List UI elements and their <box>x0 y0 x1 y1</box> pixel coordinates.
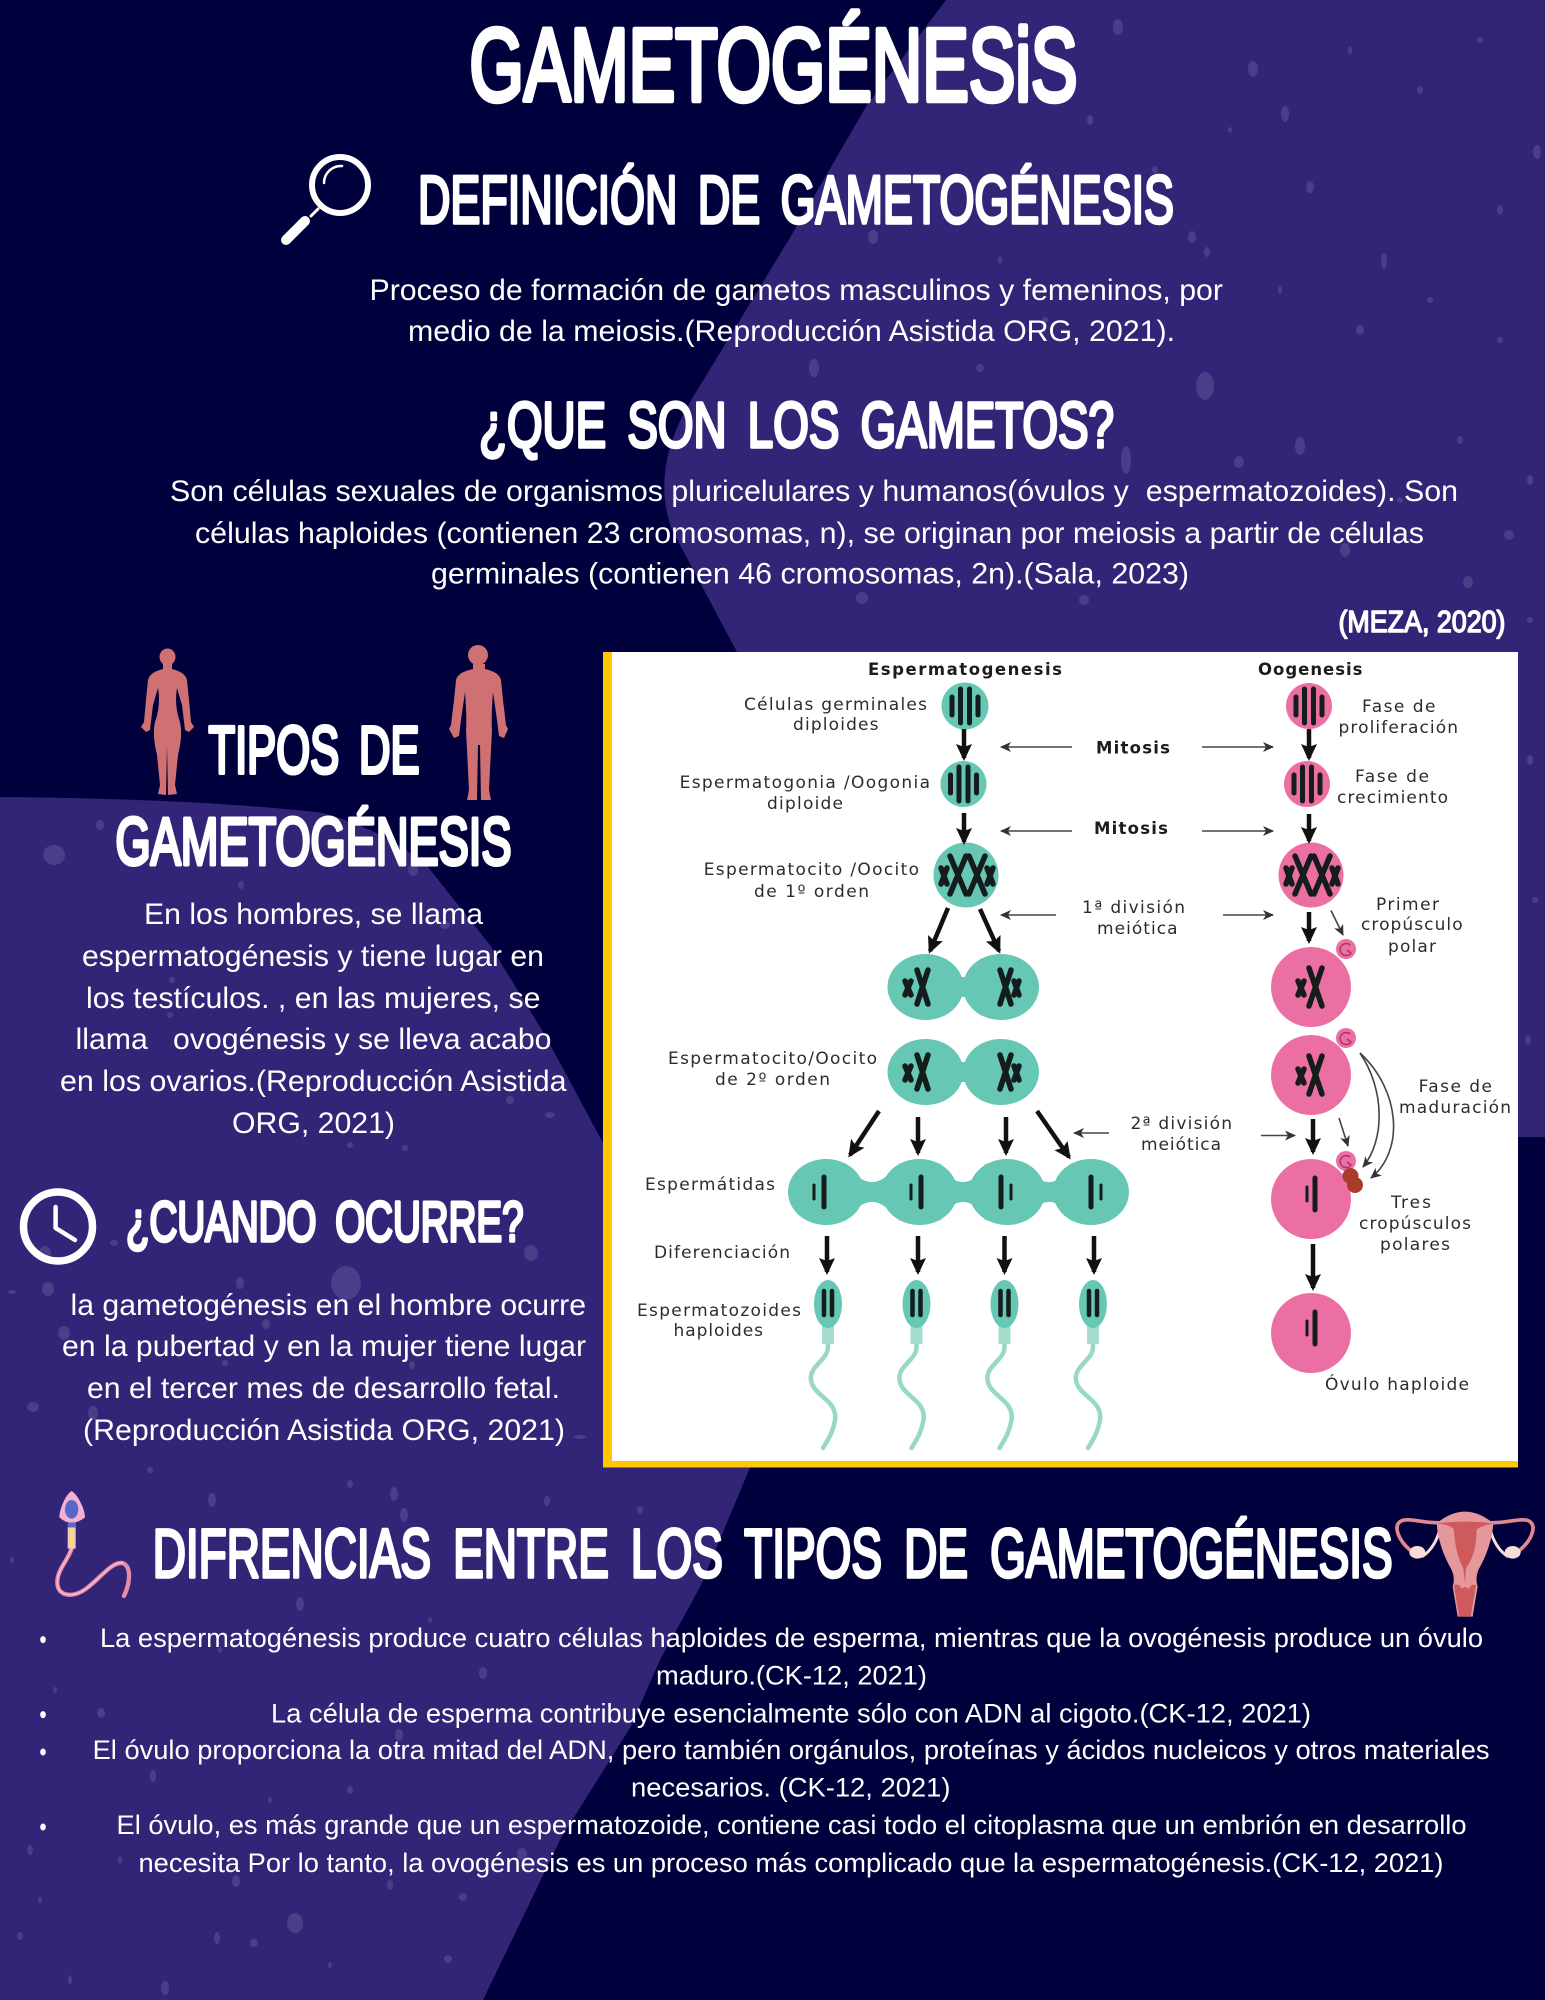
diagram labels: Mitosis <box>1096 739 1170 758</box>
diagram labels: de 2º orden <box>715 1070 830 1090</box>
diagram labels: de 1º orden <box>754 882 869 902</box>
chromosomes <box>814 689 1338 1344</box>
diagram labels: maduración <box>1399 1098 1511 1118</box>
title: GAMETOGÉNESiS <box>470 8 1078 122</box>
text: cuándo ocurre: en la pubertad y en la mujer tiene lugar <box>62 1330 586 1363</box>
text: tipos: En los hombres, se llama <box>144 898 484 931</box>
diagram labels <box>637 660 1511 1395</box>
heading: tipos de gametogénesis <box>116 713 512 880</box>
diagram labels: Fase de <box>1355 767 1429 787</box>
diagram labels: Espermatogonia /Oogonia <box>680 773 930 793</box>
text: cuándo ocurre: la gametogénesis en el hombre ocurre <box>70 1289 586 1322</box>
green cells <box>788 682 1129 1225</box>
text: tipos <box>60 898 567 1140</box>
list: diferencias: necesarios. (CK-12, 2021) <box>631 1772 950 1802</box>
text: gametos: Son células sexuales de organismos pluricelulares y humanos(óvulos y espermatozoides). Son <box>170 475 1458 508</box>
diagram labels: meiótica <box>1097 919 1178 939</box>
diagram labels: Espermatozoides <box>637 1301 801 1321</box>
diagram labels: Espermatocito /Oocito <box>704 860 919 880</box>
text: tipos: espermatogénesis y tiene lugar en <box>82 940 544 973</box>
diagram labels: 1ª división <box>1082 898 1185 918</box>
heading: cuándo ocurre: ¿CUANDO OCURRE? <box>126 1190 524 1254</box>
icon: female body <box>141 648 194 795</box>
list: diferencias: El óvulo, es más grande que un espermatozoide, contiene casi todo el citoplasma que un embrión en desarrollo <box>116 1810 1467 1840</box>
diagram labels: haploides <box>674 1321 763 1341</box>
diagram labels: Espermatocito/Oocito <box>668 1049 877 1069</box>
text: definición <box>370 274 1223 348</box>
heading: tipos de gametogénesis: TIPOS DE <box>208 713 420 788</box>
sperm cells <box>811 1280 1107 1448</box>
diagram labels: Primer <box>1376 895 1439 915</box>
list: diferencias: La espermatogénesis produce cuatro células haploides de esperma, mientras que la ovogénesis produce un óvulo <box>100 1623 1483 1653</box>
icon: clock <box>24 1192 92 1261</box>
diagram labels: Fase de <box>1362 697 1436 717</box>
thin arrows <box>1001 747 1394 1178</box>
bullets <box>40 1636 46 1830</box>
diagram labels: Mitosis <box>1094 819 1168 838</box>
list: diferencias: maduro.(CK-12, 2021) <box>656 1661 927 1691</box>
diagram labels: polar <box>1388 937 1436 957</box>
diagram labels: Células germinales <box>744 695 927 715</box>
diagram labels: Óvulo haploide <box>1325 1373 1469 1395</box>
heading: tipos de gametogénesis: GAMETOGÉNESIS <box>116 804 512 880</box>
icon: magnifying glass <box>286 157 368 240</box>
diagram labels: proliferación <box>1338 718 1458 738</box>
text: tipos: los testículos. , en las mujeres, se <box>86 982 540 1015</box>
text: gametos: células haploides (contienen 23 cromosomas, n), se originan por meiosis a partir de células <box>195 517 1424 550</box>
diagram labels: cropúsculo <box>1361 915 1463 935</box>
diagram labels: cropúsculos <box>1359 1214 1471 1234</box>
list: diferencias: necesita Por lo tanto, la ovogénesis es un proceso más complicado que la espermatogénesis.(CK-12, 2021) <box>138 1848 1444 1878</box>
citation: Meza: (MEZA, 2020) <box>1338 604 1506 639</box>
heading: gametos: ¿QUE SON LOS GAMETOS? <box>479 389 1114 461</box>
polar body marks <box>1340 944 1351 1168</box>
diagram labels: diploide <box>767 794 843 814</box>
diagram labels: Espermatogenesis <box>868 660 1062 679</box>
diagram labels: polares <box>1380 1235 1450 1255</box>
diagram labels: Tres <box>1390 1193 1431 1213</box>
text: cuándo ocurre <box>62 1289 586 1447</box>
diagram labels: meiótica <box>1141 1135 1221 1155</box>
diagram labels: Espermátidas <box>645 1175 775 1195</box>
text: gametos <box>170 475 1458 590</box>
diagram labels: Fase de <box>1419 1077 1492 1097</box>
list: diferencias: El óvulo proporciona la otra mitad del ADN, pero también orgánulos, proteínas y ácidos nucleicos y otros materiales <box>93 1735 1490 1765</box>
list: diferencias: La célula de esperma contribuye esencialmente sólo con ADN al cigoto.(CK-12, 2021) <box>271 1698 1311 1728</box>
icon: sperm <box>57 1491 129 1596</box>
text: cuándo ocurre: en el tercer mes de desarrollo fetal. <box>87 1372 560 1405</box>
diagram labels: crecimiento <box>1337 788 1448 808</box>
diagram labels: diploides <box>793 715 879 735</box>
icon: uterus <box>1397 1512 1533 1617</box>
heading: definición: DEFINICIÓN DE GAMETOGÉNESIS <box>418 162 1174 238</box>
icon: male body <box>449 645 508 800</box>
text: tipos: llama ovogénesis y se lleva acabo <box>76 1023 552 1056</box>
text: tipos: ORG, 2021) <box>232 1107 395 1140</box>
text: definición: medio de la meiosis.(Reproducción Asistida ORG, 2021). <box>408 315 1175 348</box>
panel: gametogenesis diagram <box>603 652 1518 1468</box>
list: diferencias <box>40 1623 1490 1878</box>
diagram labels: Oogenesis <box>1258 660 1363 679</box>
thick arrows <box>827 729 1313 1288</box>
polar bodies <box>1342 1168 1363 1193</box>
diagram labels: 2ª división <box>1130 1114 1232 1134</box>
text: definición: Proceso de formación de gametos masculinos y femeninos, por <box>370 274 1223 307</box>
text: gametos: germinales (contienen 46 cromosomas, 2n).(Sala, 2023) <box>431 558 1189 590</box>
diagram labels: Diferenciación <box>654 1243 790 1263</box>
text: cuándo ocurre: (Reproducción Asistida ORG, 2021) <box>83 1414 565 1447</box>
pink cells <box>1271 683 1356 1373</box>
text: tipos: en los ovarios.(Reproducción Asistida <box>60 1065 567 1098</box>
